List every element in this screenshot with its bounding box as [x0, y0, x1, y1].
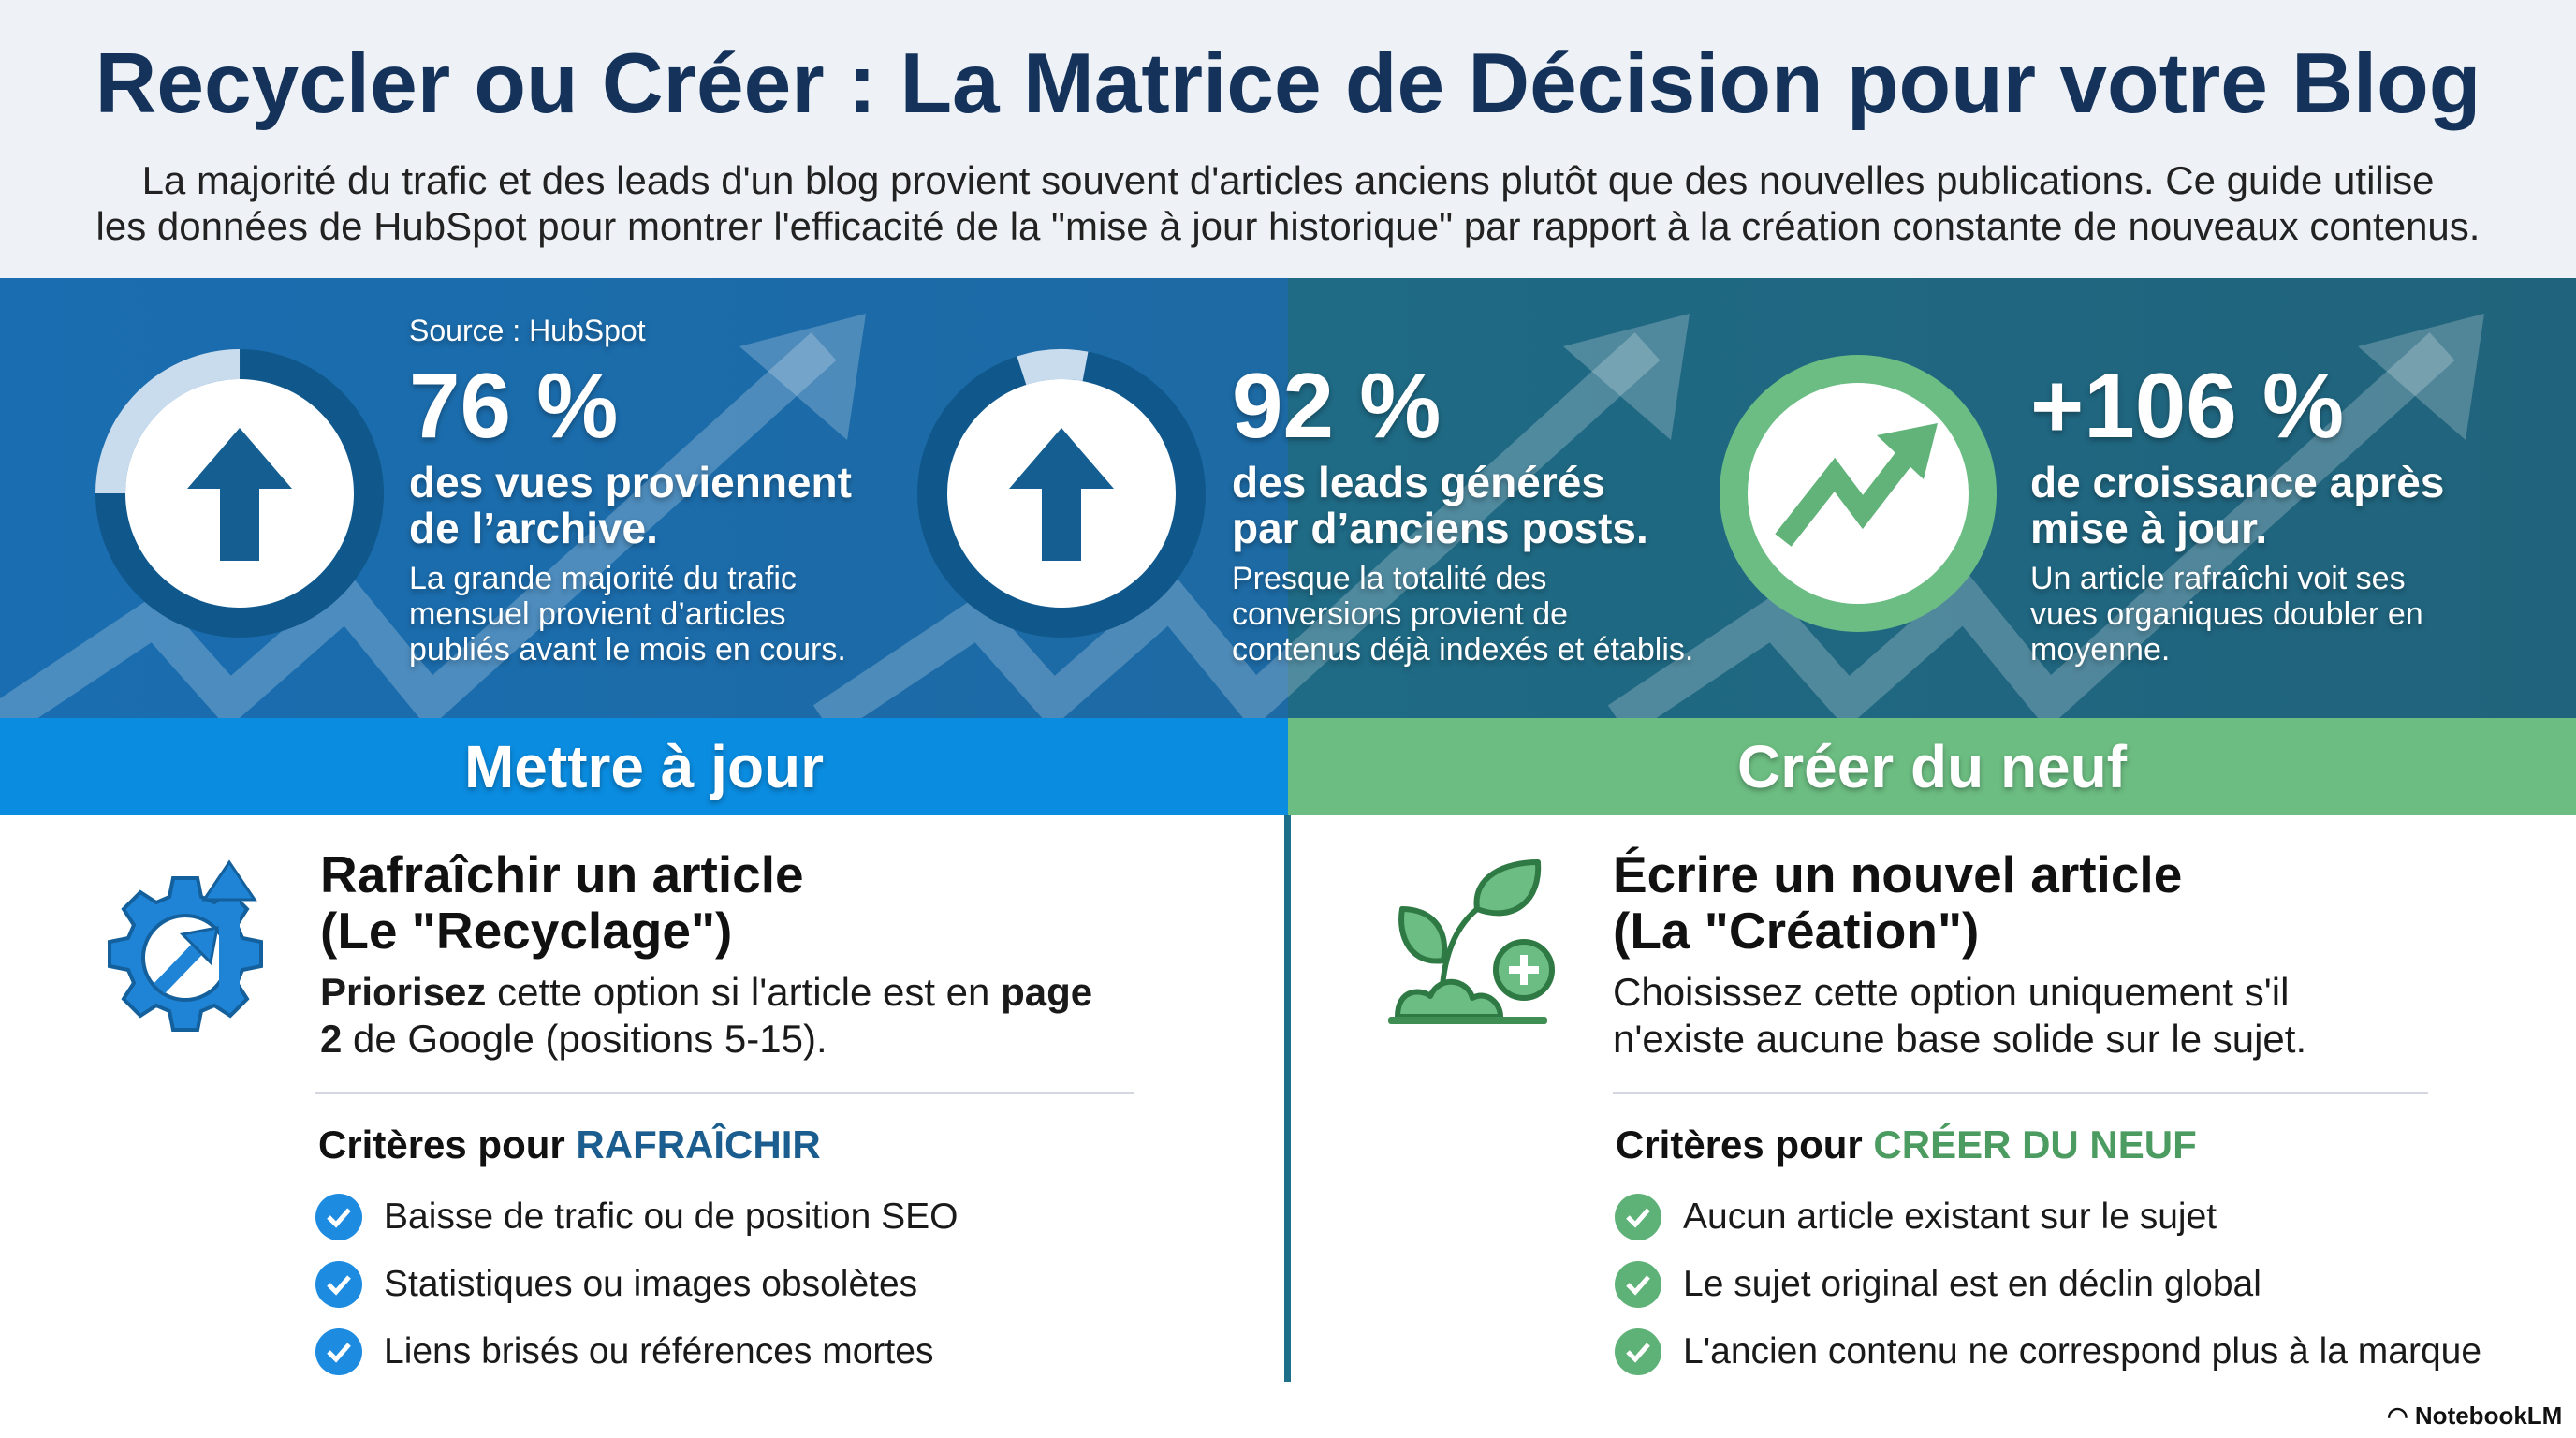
text — [320, 970, 1092, 1061]
stat 1 text — [408, 314, 853, 670]
subtitle: les données de HubSpot pour montrer l'efficacité de la "mise à jour historique" par rapport à la création constante de nouveaux contenus. — [96, 204, 2480, 248]
stat 3 text: +106 % — [2030, 354, 2344, 457]
stat 1 text: Source : HubSpot — [409, 314, 646, 347]
heading: (Le "Recyclage") — [320, 902, 732, 960]
icon: plant — [1388, 859, 1555, 1024]
checklist: Le sujet original est en déclin global — [1683, 1264, 2261, 1304]
checklist: Statistiques ou images obsolètes — [384, 1264, 917, 1304]
stat 1 text: de l’archive. — [409, 504, 658, 552]
stat 1 text: des vues proviennent — [409, 458, 852, 506]
criteria heading: Critères pour RAFRAÎCHIR — [318, 1123, 821, 1167]
header — [0, 0, 2576, 278]
title: Recycler ou Créer : La Matrice de Décision pour votre Blog — [95, 37, 2481, 131]
stat 3 text: de croissance après — [2030, 458, 2444, 506]
stat 3 text: vues organiques doubler en — [2030, 596, 2423, 632]
subtitle: La majorité du trafic et des leads d'un blog provient souvent d'articles anciens plutôt que des nouvelles publications. Ce guide utilise — [142, 158, 2434, 202]
text: Choisissez cette option uniquement s'il — [1613, 970, 2289, 1014]
stat 2 text: par d’anciens posts. — [1232, 504, 1648, 552]
stat 1 text: mensuel provient d’articles — [409, 596, 786, 632]
criteria heading: Critères pour CRÉER DU NEUF — [1616, 1123, 2197, 1167]
subtitle — [96, 158, 2480, 248]
stat 2 text: Presque la totalité des — [1232, 561, 1546, 596]
heading — [1613, 845, 2182, 960]
heading: (La "Création") — [1613, 902, 1979, 960]
bar: Mettre à jour — [0, 718, 1288, 815]
stat 3 text: Un article rafraîchi voit ses — [2030, 561, 2406, 596]
text: n'existe aucune base solide sur le sujet. — [1613, 1017, 2306, 1061]
heading: Écrire un nouvel article — [1613, 845, 2182, 903]
stat 2 text — [1231, 354, 1693, 670]
panel: right — [1388, 845, 2481, 1375]
checklist: Baisse de trafic ou de position SEO — [384, 1196, 959, 1237]
heading: Rafraîchir un article — [320, 845, 804, 903]
icon: stat 2 ring — [917, 348, 1206, 638]
stat 2 text: des leads générés — [1232, 458, 1605, 506]
bar: Créer du neuf — [1288, 718, 2576, 815]
stats band — [0, 278, 2576, 718]
icon: stat 1 ring — [95, 349, 384, 638]
checklist: Liens brisés ou références mortes — [384, 1331, 933, 1372]
text — [1613, 970, 2306, 1061]
stat 1 text: publiés avant le mois en cours. — [409, 632, 846, 668]
icon: stat 3 growth ring — [1720, 355, 1997, 632]
stat 2 text: contenus déjà indexés et établis. — [1232, 632, 1693, 668]
checklist — [1615, 1194, 2481, 1375]
text: Priorisez cette option si l'article est en page — [320, 970, 1092, 1014]
bar: Créer du neuf: Créer du neuf — [1737, 733, 2127, 800]
stat 3 text — [2030, 354, 2444, 670]
checklist: Aucun article existant sur le sujet — [1683, 1196, 2217, 1237]
panel: left — [108, 845, 1134, 1375]
stat 2 text: conversions provient de — [1232, 596, 1568, 632]
divider vertical — [1284, 815, 1291, 1382]
stat 1 text: 76 % — [409, 354, 618, 457]
checklist — [315, 1194, 959, 1375]
icon: gear with arrow — [108, 859, 263, 1032]
text: 2 de Google (positions 5-15). — [320, 1017, 827, 1061]
logo: NotebookLM: ◠ NotebookLM — [2387, 1401, 2562, 1430]
stat 3 text: mise à jour. — [2030, 504, 2267, 552]
stat 1 text: La grande majorité du trafic — [409, 561, 797, 596]
stat 3 text: moyenne. — [2030, 632, 2170, 668]
checklist: L'ancien contenu ne correspond plus à la marque — [1683, 1331, 2481, 1372]
stat 2 text: 92 % — [1232, 354, 1441, 457]
heading — [320, 845, 804, 960]
bar: Mettre à jour: Mettre à jour — [464, 733, 824, 800]
